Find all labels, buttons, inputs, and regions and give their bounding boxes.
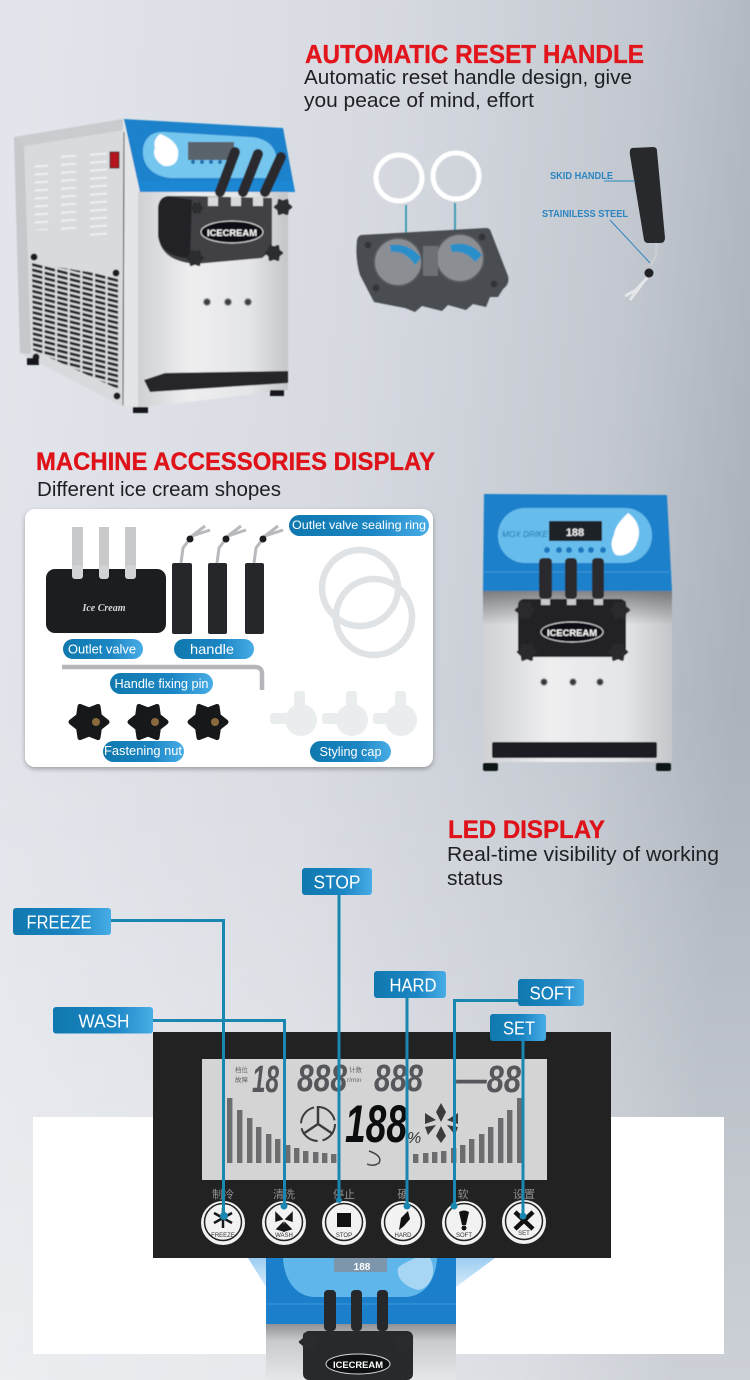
- pill: outlet valve sealing ring: Outlet valve sealing ring: [292, 518, 426, 532]
- text block: automatic reset description: Automatic reset handle design, give: [304, 66, 632, 89]
- mini display: [549, 521, 602, 541]
- button captions: 设置: [513, 1188, 535, 1201]
- button: set: SET: [518, 1231, 530, 1237]
- badge: icecream: ICECREAM: [547, 628, 597, 639]
- button: freeze: FREEZE: [211, 1233, 235, 1239]
- ventilation grill: [32, 263, 120, 390]
- lcd icon: fan: [301, 1106, 335, 1141]
- text block: led description: status: [447, 867, 503, 890]
- machine: cropped front view: [248, 1258, 495, 1380]
- pill: outlet valve: Outlet valve: [68, 642, 136, 656]
- blue top: [124, 119, 295, 192]
- swirl logo: [612, 513, 639, 555]
- drain holes: [204, 299, 251, 305]
- button captions: 硬: [398, 1188, 408, 1201]
- pill: outlet valve: [63, 639, 143, 659]
- valve body: [303, 1331, 413, 1380]
- button: wash: [262, 1201, 306, 1245]
- pill: fastening nut: [103, 741, 184, 762]
- sealing rings: [322, 550, 412, 655]
- callout end dots: [220, 1197, 526, 1220]
- styling caps: [270, 691, 417, 736]
- heading: led display: LED DISPLAY: [448, 816, 605, 844]
- mini display: [188, 142, 234, 160]
- button: stop: [322, 1201, 366, 1245]
- pill: styling cap: Styling cap: [320, 745, 382, 759]
- panel: control board: [153, 1032, 611, 1258]
- valve back housing: [356, 228, 508, 312]
- blue seal patches: [390, 245, 421, 265]
- side louvers: [35, 152, 107, 237]
- sealing rings: [376, 153, 479, 201]
- lcd labels: 计数: [349, 1065, 362, 1074]
- corner screws: [30, 254, 120, 400]
- button: stop: STOP: [336, 1233, 352, 1239]
- button: wash: WASH: [275, 1233, 293, 1239]
- label: soft: [518, 979, 584, 1006]
- drip tray: [492, 742, 657, 758]
- button captions: 清洗: [273, 1188, 295, 1201]
- feet: [483, 763, 671, 771]
- swirl logo: [154, 134, 178, 166]
- label: set: [490, 1014, 546, 1041]
- pill: outlet valve sealing ring: [289, 515, 429, 536]
- handle clamps: [541, 599, 603, 605]
- mini display reading: 188: [354, 1262, 371, 1273]
- lcd icon: snowflake: [425, 1103, 458, 1143]
- feet: [27, 358, 284, 413]
- heading: machine accessories display: MACHINE ACCESSORIES DISPLAY: [36, 448, 435, 476]
- dispensing valve body: [158, 196, 272, 264]
- blue top: [266, 1258, 456, 1324]
- stainless body: [266, 1324, 456, 1380]
- button: hard: HARD: [394, 1233, 412, 1239]
- white stage: [33, 1117, 724, 1354]
- button: freeze: [201, 1201, 245, 1245]
- label: freeze: [13, 908, 111, 935]
- label: hard: [374, 971, 446, 998]
- lcd top digits: —88: [455, 1059, 522, 1101]
- valve body: [518, 599, 626, 657]
- side panel: [14, 119, 125, 408]
- screw holes: [364, 234, 498, 292]
- control panel: [498, 508, 652, 563]
- control panel: [283, 1258, 437, 1297]
- text block: automatic reset description: [304, 66, 632, 112]
- mini display reading: 188: [566, 527, 584, 539]
- label: freeze: FREEZE: [26, 912, 92, 932]
- badge: icecream: [201, 221, 263, 243]
- ring leader lines: [406, 203, 455, 245]
- swirl logo: [398, 1258, 433, 1290]
- label: skid handle: SKID HANDLE: [550, 171, 613, 182]
- callout lines: [110, 895, 523, 1216]
- badge: icecream: ICECREAM: [207, 228, 257, 239]
- label: stainless steel: STAINILESS STEEL: [542, 209, 628, 220]
- brand text: MOX DRIKE: [502, 530, 549, 539]
- lcd top digits: 888: [374, 1058, 424, 1100]
- lcd bars right: [413, 1098, 522, 1163]
- lcd top digits: [252, 1058, 522, 1101]
- outlet valve: Ice Cream: [81, 603, 126, 614]
- valve knobs: [300, 1334, 412, 1351]
- button captions: 软: [458, 1187, 468, 1201]
- badge: icecream: [541, 622, 603, 642]
- valve knobs: [187, 200, 291, 265]
- handles: [172, 526, 283, 634]
- mini buttons: [544, 547, 606, 553]
- pill: styling cap: [310, 741, 391, 762]
- label: soft: SOFT: [530, 984, 575, 1004]
- panel: accessories: [25, 509, 433, 767]
- corner column: [123, 119, 140, 408]
- light beam: [248, 1258, 495, 1287]
- lcd large reading: 188: [345, 1095, 407, 1154]
- diagram: sealing rings and valve back: [356, 153, 508, 312]
- stainless front: [138, 192, 288, 408]
- text block: automatic reset description: you peace of mind, effort: [304, 89, 534, 112]
- stainless body: [483, 591, 672, 762]
- button: soft: SOFT: [456, 1233, 472, 1239]
- handle close-up: [604, 147, 665, 300]
- lcd labels: 故障: [235, 1075, 248, 1084]
- heading: automatic reset handle: AUTOMATIC RESET HANDLE: [305, 39, 644, 69]
- label: stop: STOP: [314, 872, 360, 892]
- label: stop: [302, 868, 372, 895]
- label: set: SET: [503, 1018, 535, 1038]
- rocker switch: [110, 152, 119, 168]
- handle leader lines: [604, 181, 650, 263]
- lcd screen: [202, 1058, 547, 1180]
- mini buttons: [191, 160, 222, 164]
- machine: front view: [483, 494, 672, 771]
- valve knobs: [516, 602, 629, 660]
- pill: handle: handle: [190, 641, 234, 657]
- hex key: handle fixing pin: [62, 667, 262, 690]
- lcd labels: r/min: [347, 1077, 362, 1084]
- text block: led description: Real-time visibility of working: [447, 843, 719, 866]
- button captions: [212, 1187, 535, 1201]
- lcd icon: wave: [367, 1151, 380, 1165]
- drain holes: [541, 679, 603, 685]
- label: wash: [53, 1007, 153, 1034]
- blue top: [483, 494, 672, 591]
- control panel: [143, 132, 277, 178]
- handles: [220, 152, 281, 192]
- button captions: 停止: [333, 1187, 355, 1201]
- pill: fastening nut: Fastening nut: [104, 744, 183, 758]
- text block: led description: [447, 843, 719, 890]
- handle clamps: [208, 197, 263, 206]
- lcd labels: 档位: [235, 1065, 248, 1074]
- pill: handle fixing pin: Handle fixing pin: [114, 677, 209, 691]
- text block: accessories description: Different ice cream shopes: [37, 478, 281, 501]
- label: wash: WASH: [78, 1012, 130, 1032]
- button captions: 制冷: [212, 1188, 234, 1201]
- machine: angled three-quarter view: [14, 119, 295, 413]
- handles: [539, 558, 604, 599]
- fastening nuts: [71, 706, 226, 738]
- handles: [324, 1290, 388, 1331]
- drip tray: [144, 371, 288, 392]
- lcd bars left: [227, 1098, 336, 1163]
- lcd percent: %: [407, 1130, 421, 1147]
- badge: icecream: ICECREAM: [333, 1360, 383, 1371]
- mini display: [334, 1258, 387, 1272]
- button: soft: [442, 1201, 486, 1245]
- lcd top digits: 18: [252, 1059, 280, 1101]
- pill: handle fixing pin: [110, 673, 213, 694]
- label: hard: HARD: [390, 976, 436, 996]
- button: hard: [381, 1201, 425, 1245]
- button: set: [502, 1200, 546, 1244]
- lcd top digits: 888: [297, 1058, 348, 1100]
- pill: handle: [174, 639, 254, 659]
- outlet valve: [46, 527, 166, 633]
- badge: icecream: [326, 1354, 390, 1374]
